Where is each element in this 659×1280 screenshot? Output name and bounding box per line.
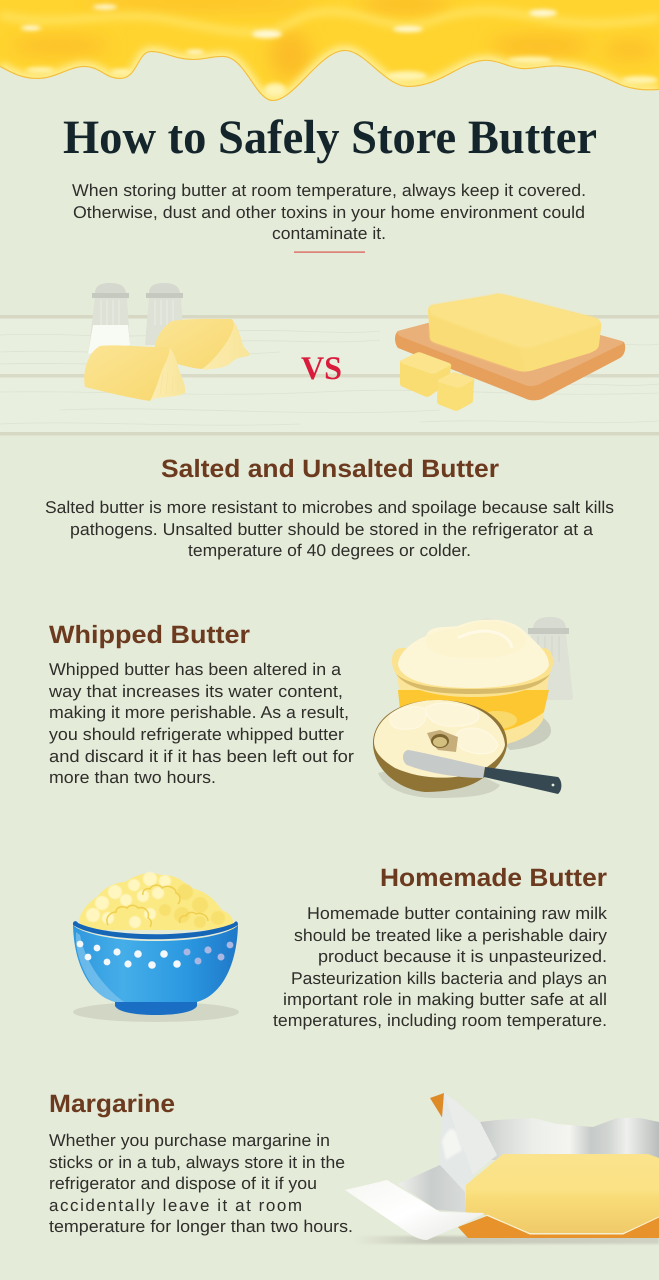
section heading: margarine: Margarine [49, 1090, 175, 1118]
orange tray [458, 1216, 659, 1238]
whipped cream [398, 620, 549, 688]
intro text: When storing butter at room temperature, always keep it covered. [72, 181, 586, 200]
intro text: contaminate it. [272, 224, 386, 243]
icon: salt shakers [88, 283, 184, 354]
text: margarine [49, 1131, 353, 1236]
orange corner [430, 1093, 444, 1119]
text: salted and unsalted: temperature of 40 degrees or colder. [188, 541, 471, 560]
text: homemade butter: Pasteurization kills bacteria and plays an [291, 969, 607, 988]
icon: butter curls [84, 319, 250, 401]
back curl [154, 319, 250, 370]
melted butter drip header [0, 0, 659, 105]
section heading: salted and unsalted: Salted and Unsalted Butter [161, 455, 499, 483]
foil wrapper back [480, 1118, 659, 1160]
text: homemade butter: should be treated like a perishable dairy [294, 926, 608, 945]
tub [392, 648, 553, 748]
bowl shadow [73, 1002, 239, 1022]
intro text: Otherwise, dust and other toxins in your home environment could [73, 203, 585, 222]
intro text [72, 181, 586, 243]
left foil fold [398, 1165, 465, 1212]
shaker behind tub [475, 617, 573, 700]
icon: whipped butter tub and bagel [373, 617, 573, 798]
text: salted and unsalted: Salted butter is more resistant to microbes and spoilage because salt kills [45, 498, 614, 517]
text: margarine: accidentally leave it at room [49, 1196, 302, 1215]
white paper flap [345, 1180, 485, 1240]
margarine block [465, 1154, 659, 1234]
tub shadow [500, 712, 551, 750]
icon: blue bowl of butter pieces [73, 872, 239, 1022]
text: homemade butter [273, 904, 608, 1030]
text: salted and unsalted [45, 498, 614, 560]
icon: butter block on cutting board [395, 294, 625, 411]
highlight blobs [21, 4, 658, 97]
text: homemade butter: temperatures, including room temperature. [273, 1011, 607, 1030]
shaker right [145, 283, 184, 345]
text: homemade butter: Homemade butter containing raw milk [307, 904, 608, 923]
section heading: whipped butter: Whipped Butter [49, 621, 250, 649]
bagel shadow [378, 770, 500, 798]
text: whipped butter: Whipped butter has been altered in a [49, 660, 342, 679]
text: margarine: sticks or in a tub, always store it in the [49, 1153, 345, 1172]
text: homemade butter: product because it is unpasteurized. [318, 947, 607, 966]
icon: wrapped margarine block [345, 1093, 659, 1244]
board [395, 323, 625, 400]
wooden table band [0, 315, 659, 436]
butter cube large [400, 352, 451, 397]
bowl body [73, 921, 238, 1015]
VS label: VS [301, 351, 342, 387]
section heading: homemade butter: Homemade Butter [380, 864, 607, 892]
text: whipped butter: and discard it if it has been left out for [49, 747, 354, 766]
text: margarine: temperature for longer than two hours. [49, 1217, 353, 1236]
text: whipped butter: more than two hours. [49, 768, 216, 787]
butter cube small [437, 372, 474, 411]
butter block [428, 294, 601, 372]
lower rim glow [0, 51, 659, 101]
ground shadow [355, 1236, 659, 1244]
front curl [84, 345, 185, 401]
tall foil fold [440, 1093, 497, 1192]
butter pile [79, 872, 234, 930]
title: How to Safely Store Butter [63, 111, 597, 164]
bagel [373, 700, 507, 792]
text: whipped butter: way that increases its water content, [48, 682, 343, 701]
polka dots [77, 941, 181, 969]
red divider [294, 252, 365, 253]
text: whipped butter [48, 660, 354, 787]
text: salted and unsalted: pathogens. Unsalted butter should be stored in the refrigerator at a [70, 520, 594, 539]
text: margarine: refrigerator and dispose of it if you [49, 1174, 317, 1193]
shaker left [88, 283, 130, 354]
text: margarine: Whether you purchase margarine in [49, 1131, 330, 1150]
text: homemade butter: important role in making butter safe at all [283, 990, 607, 1009]
text: whipped butter: making it more perishable. As a result, [49, 703, 349, 722]
text: whipped butter: you should refrigerate whipped butter [49, 725, 344, 744]
knife [403, 750, 561, 794]
